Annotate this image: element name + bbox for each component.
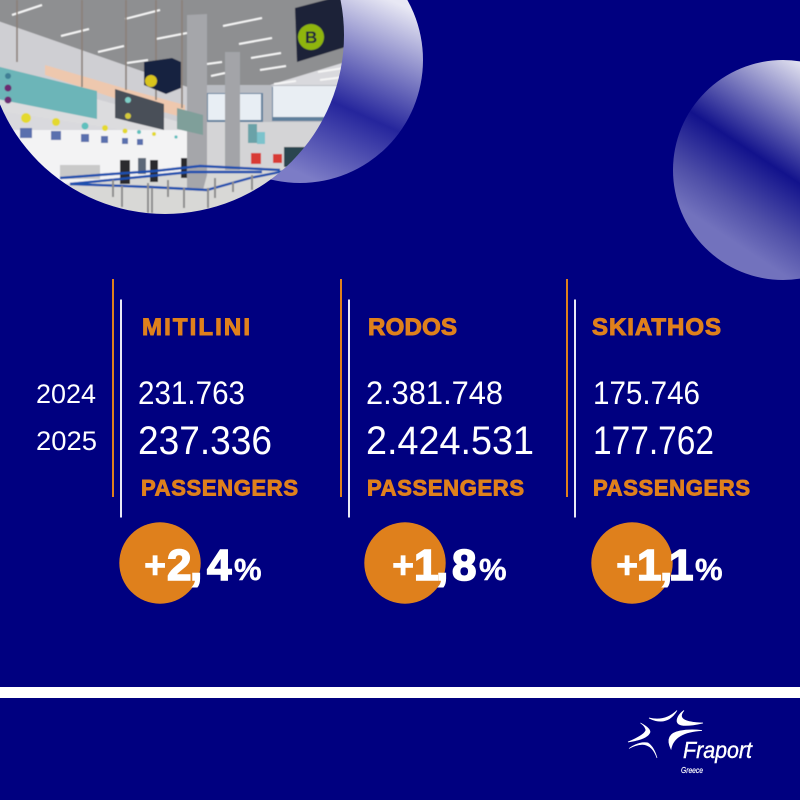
value 2025: 2.424.531 xyxy=(366,419,534,463)
photo: airport departure hall xyxy=(0,0,352,220)
icon: star swooshes xyxy=(628,710,703,758)
check-in counters xyxy=(21,113,156,136)
hanging rods xyxy=(17,0,182,108)
heading: Skiathos: SKIATHOS xyxy=(592,314,721,341)
year labels xyxy=(36,379,97,456)
change value: + xyxy=(616,545,638,587)
panel: Mitilini xyxy=(112,279,298,604)
change value: 2 xyxy=(167,541,191,590)
unit label: PASSENGERS xyxy=(593,476,750,500)
white rule xyxy=(348,300,350,518)
teal sign xyxy=(0,65,97,119)
sub-brand: Greece xyxy=(681,766,703,775)
change value: 1 xyxy=(414,541,438,590)
people xyxy=(120,158,187,184)
label: 2025: 2025 xyxy=(36,426,97,456)
orange rule xyxy=(112,279,114,497)
change value: 1 xyxy=(669,541,693,590)
photo: airport departure hall: B xyxy=(305,28,317,47)
red panels and screen xyxy=(251,153,261,164)
B gate sign xyxy=(294,0,344,62)
gradient circle: top right xyxy=(673,60,800,280)
change badge xyxy=(591,522,673,604)
label: 2024: 2024 xyxy=(36,379,96,409)
pale sign xyxy=(177,108,203,135)
change badge xyxy=(364,522,446,604)
columns xyxy=(187,14,207,190)
value 2024: 2.381.748 xyxy=(366,375,503,411)
change badge xyxy=(119,522,201,604)
change value: , xyxy=(660,541,672,590)
change value: + xyxy=(144,545,166,587)
orange rule xyxy=(566,279,568,497)
unit label: PASSENGERS xyxy=(141,476,298,500)
heading: Mitilini: MITILINI xyxy=(142,314,250,341)
stanchion belts xyxy=(60,166,290,190)
gradient circle: behind photo xyxy=(177,0,423,183)
change value: % xyxy=(479,552,507,587)
dark direction sign xyxy=(115,89,164,130)
white rule xyxy=(574,300,576,518)
change value: 4 xyxy=(207,541,232,590)
wordmark: Fraport xyxy=(683,737,753,763)
white rule xyxy=(120,300,122,518)
panel: Rodos xyxy=(340,279,534,604)
panel: Skiathos xyxy=(566,279,750,604)
footer band xyxy=(0,687,800,698)
value 2024: 231.763 xyxy=(138,375,245,411)
change value: + xyxy=(392,545,414,587)
change value: , xyxy=(436,541,448,590)
ceiling lights xyxy=(12,5,344,84)
change value: 8 xyxy=(452,541,476,590)
logo: Fraport Greece xyxy=(628,710,753,775)
change value: 1 xyxy=(637,541,661,590)
value 2025: 177.762 xyxy=(593,419,714,463)
heading: Rodos: RODOS xyxy=(368,314,457,341)
unit label: PASSENGERS xyxy=(367,476,524,500)
orange rule xyxy=(340,279,342,497)
value 2025: 237.336 xyxy=(138,419,272,463)
hanging yellow sign xyxy=(144,58,181,94)
change value: , xyxy=(190,541,202,590)
value 2024: 175.746 xyxy=(593,375,700,411)
change value: % xyxy=(234,552,262,587)
change value: % xyxy=(695,552,723,587)
